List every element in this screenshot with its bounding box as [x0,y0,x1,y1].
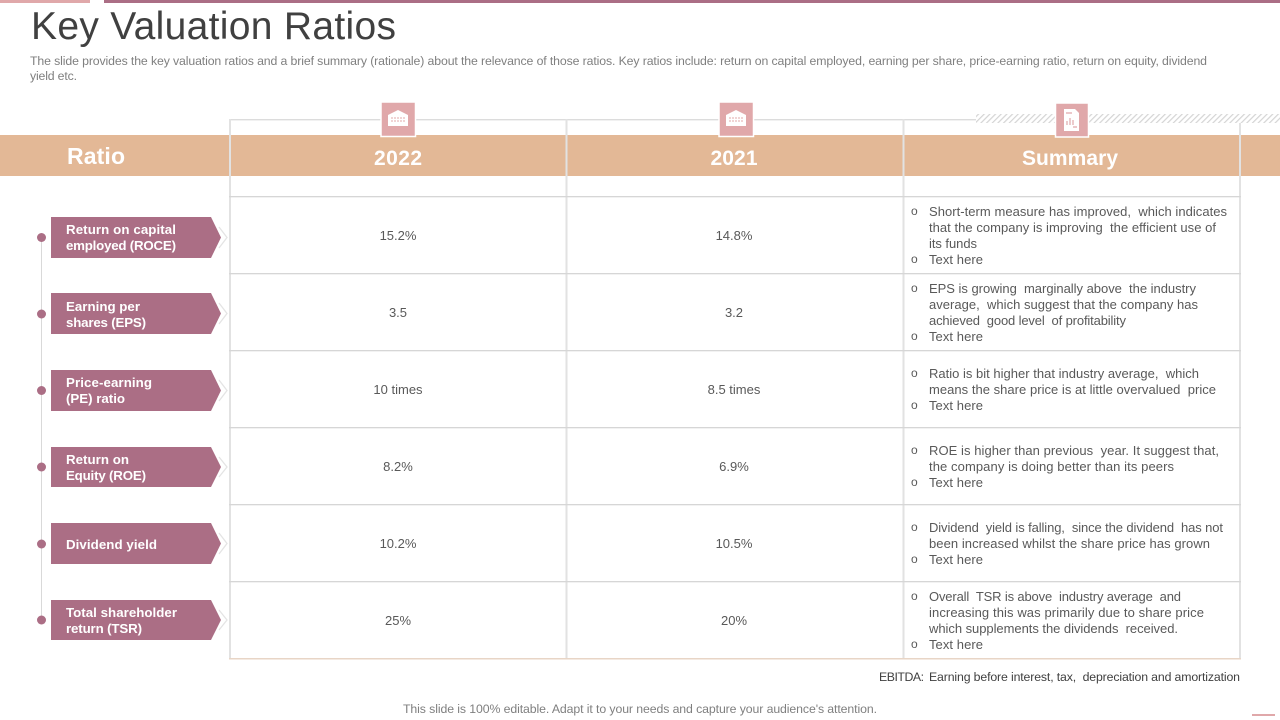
summary: EPS [911,281,1198,344]
ratio label: PE: Price-earning [66,375,152,390]
2021 values [708,228,761,628]
top accent bars [0,0,1280,3]
summary: ROE: the company is doing better than its peers [929,459,1174,474]
2021 values: 14.8% [716,228,753,243]
ratio label: PE: (PE) ratio [66,391,125,406]
summary: PE: o [911,366,918,380]
summary: TSR: o [911,589,918,603]
2021 values: 3.2 [725,305,743,320]
2022 values [373,228,423,628]
summary: ROE: o [911,443,918,457]
summary: EPS: Text here [929,329,983,344]
ratio label: ROE [37,447,227,487]
icon: calendar 2022 [381,102,416,136]
2021 values: 6.9% [719,459,749,474]
ratio label: TSR: Total shareholder [66,605,177,620]
ratio label: TSR: return (TSR) [66,621,142,636]
2022 values: 10.2% [380,536,417,551]
summary: ROCE: o [911,252,918,266]
subtitle text block [30,54,1207,83]
timeline line [40,237,42,620]
header: Ratio: Ratio [67,143,125,169]
2022 values: 8.2% [383,459,413,474]
2021 values: 10.5% [716,536,753,551]
summary: EPS: o [911,329,918,343]
summary: ROE: ROE is higher than previous year. It suggest that, [929,443,1219,458]
ratio label: EPS [37,293,227,334]
summary: ROE: o [911,475,918,489]
summary: EPS: o [911,281,918,295]
summary: EPS: EPS is growing marginally above the industry [929,281,1196,296]
ratio label: ROE: Equity (ROE) [66,468,146,483]
summary: TSR [911,589,1204,652]
ratio label: PE [37,370,227,411]
summary: EPS: achieved good level of profitability [929,313,1126,328]
ratio label: ROCE [37,217,227,258]
ratio label: Dividend yield [37,523,227,564]
ratio label: Dividend yield: Dividend yield [66,537,157,552]
ratio label: ROCE: Return on capital [66,222,176,237]
ratio label: EPS: Earning per [66,299,140,314]
summary: TSR: which supplements the dividends received. [928,621,1178,636]
summary: EPS: average, which suggest that the company has [929,297,1198,312]
table grid [229,119,1241,660]
footer note: This slide is 100% editable. Adapt it to your needs and capture your audience's attention. [403,702,877,716]
subtitle text block: yield etc. [30,69,77,83]
summary: ROCE: Short-term measure has improved, which indicates [929,204,1228,219]
summary: PE: Text here [929,398,983,413]
ratio label: ROE: Return on [66,452,129,467]
ratio label: EPS: shares (EPS) [66,315,146,330]
summary: Dividend yield: been increased whilst the share price has grown [929,536,1210,551]
summary: PE: means the share price is at little overvalued price [929,382,1216,397]
title: Key Valuation Ratios [31,5,396,48]
2022 values: 3.5 [389,305,407,320]
summary: ROCE: its funds [929,236,978,251]
summary: ROCE [911,204,1228,267]
header: Summary: Summary [1022,147,1118,170]
summary: Dividend yield: o [911,520,918,534]
subtitle text block: The slide provides the key valuation ratios and a brief summary (rationale) about the relevance of those ratios. Key ratios include: return on capital employed, earning per share, price-earning ratio, return on equity, dividend [30,54,1207,68]
header: 2022: 2022 [374,147,422,170]
ratio label: ROCE: employed (ROCE) [66,238,176,253]
header: 2021: 2021 [710,147,758,170]
summary: TSR: Overall TSR is above industry average and [929,589,1181,604]
ratio label: TSR [37,600,227,640]
summary: ROE [911,443,1219,490]
icon: calendar 2021 [719,102,754,136]
summary: ROCE: Text here [929,252,983,267]
summary: ROCE: that the company is improving the efficient use of [929,220,1216,235]
2022 values: 25% [385,613,411,628]
icon: report document [1056,103,1088,137]
summary: Dividend yield: o [911,552,918,566]
summary: PE: o [911,398,918,412]
summary: Dividend yield [911,520,1223,567]
2021 values: 8.5 times [708,382,761,397]
page marker [1252,714,1275,716]
summary: TSR: Text here [929,637,983,652]
2022 values: 10 times [373,382,423,397]
summary: ROE: Text here [929,475,983,490]
summary: PE: Ratio is bit higher that industry average, which [929,366,1199,381]
header band [0,135,1280,176]
EBITDA footnote: EBITDA: [879,670,924,684]
summary: Dividend yield: Dividend yield is falling, since the dividend has not [929,520,1223,535]
2021 values: 20% [721,613,747,628]
summary: TSR: o [911,637,918,651]
summary: ROCE: o [911,204,918,218]
EBITDA footnote: Earning before interest, tax, depreciation and amortization [929,670,1240,684]
summary: Dividend yield: Text here [929,552,983,567]
summary: PE [911,366,1216,413]
summary: TSR: increasing this was primarily due to share price [929,605,1204,620]
2022 values: 15.2% [380,228,417,243]
decorative hatch strip [976,114,1280,123]
